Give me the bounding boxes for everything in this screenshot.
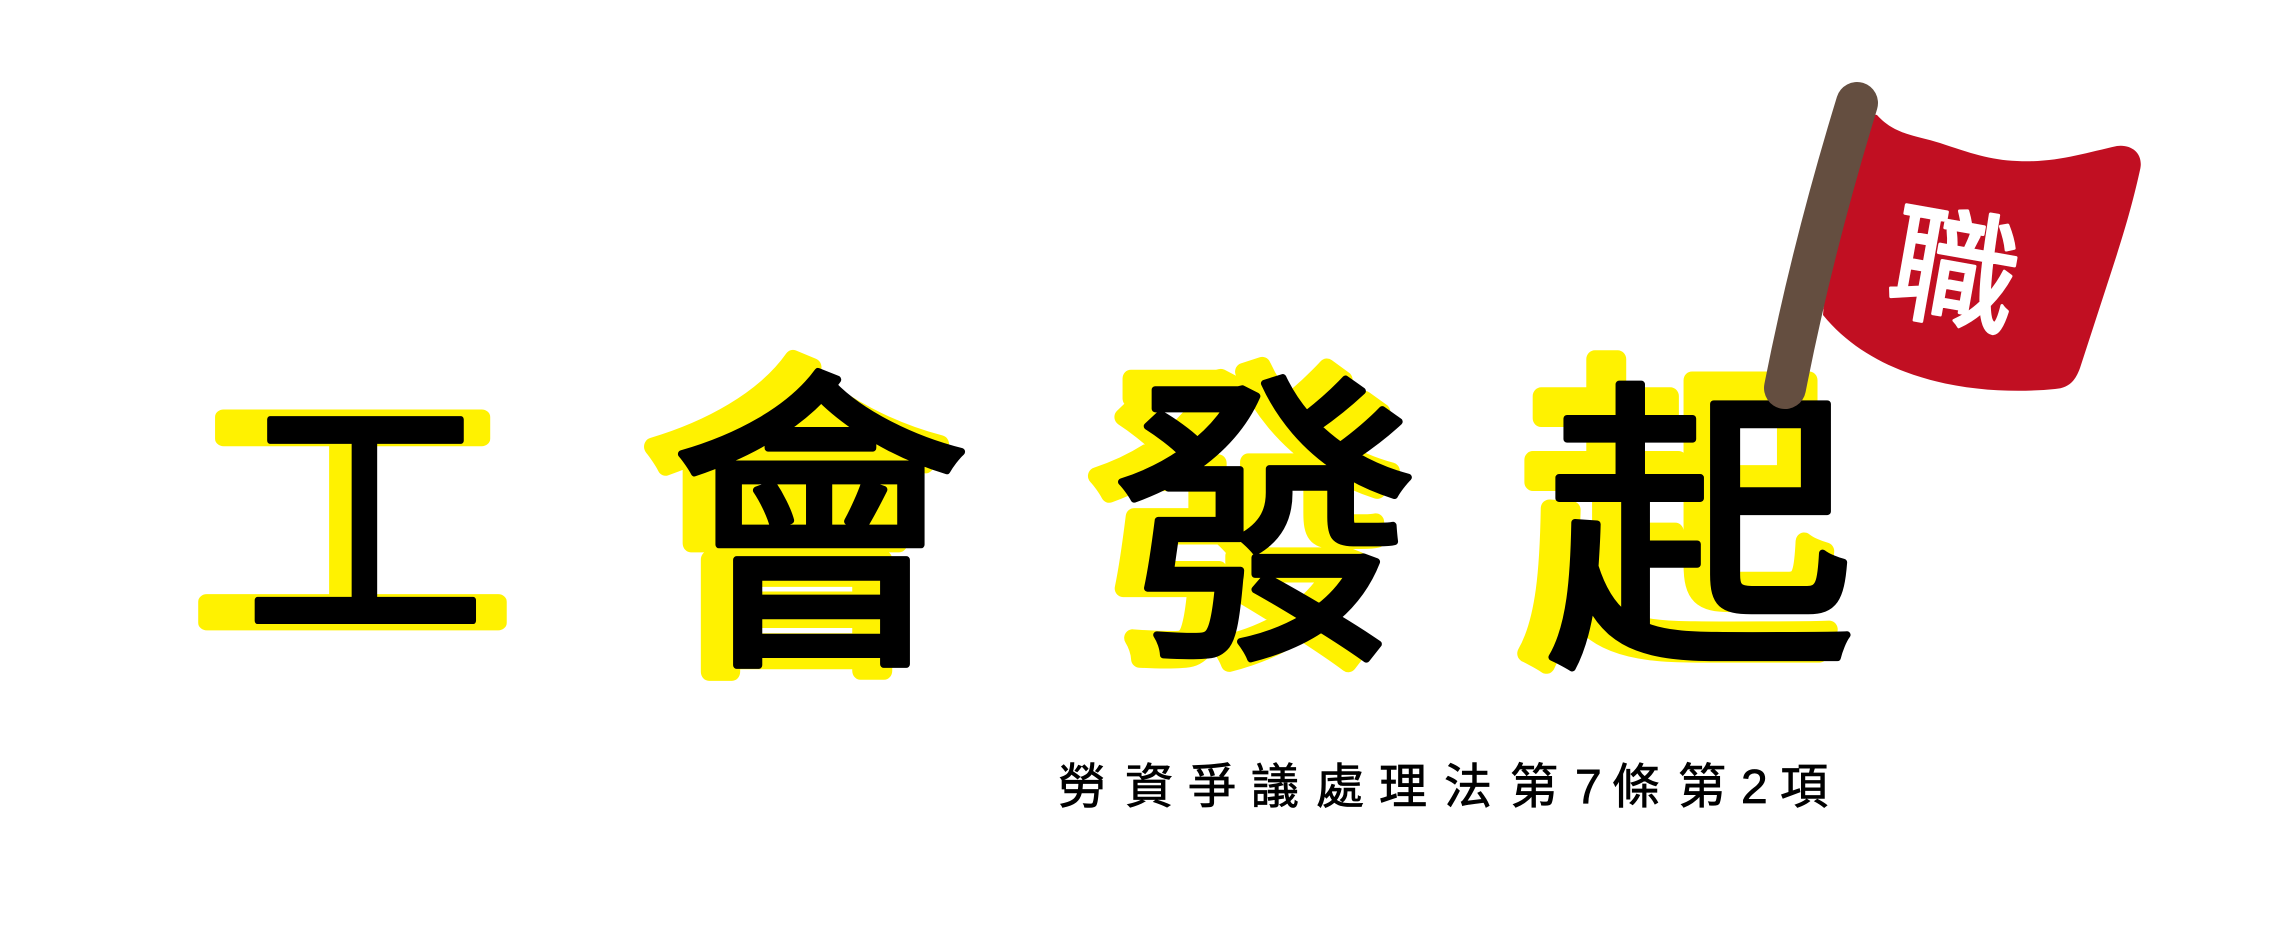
icon: red flag xyxy=(1785,103,2141,391)
title: 工會發起 xyxy=(245,352,1856,708)
title: 工會發起: 起 xyxy=(1544,365,1856,706)
title: 工會發起: 發 xyxy=(1113,357,1419,699)
title: yellow shadow layer: 發 xyxy=(1088,344,1402,706)
title: 工會發起: 會 xyxy=(670,352,970,708)
title: 工會發起: 工 xyxy=(245,370,485,679)
title: yellow shadow layer: 工 xyxy=(190,368,514,682)
subtitle: legal citation: 勞資爭議處理法第7條第2項 xyxy=(1058,761,1828,814)
flag cloth xyxy=(1823,108,2141,391)
flag pole xyxy=(1785,103,1857,388)
title: yellow shadow layer: 起 xyxy=(1517,337,1839,706)
flag character: 職 xyxy=(1878,191,2029,354)
title: yellow shadow layer xyxy=(190,337,1839,717)
title: yellow shadow layer: 會 xyxy=(641,338,949,717)
